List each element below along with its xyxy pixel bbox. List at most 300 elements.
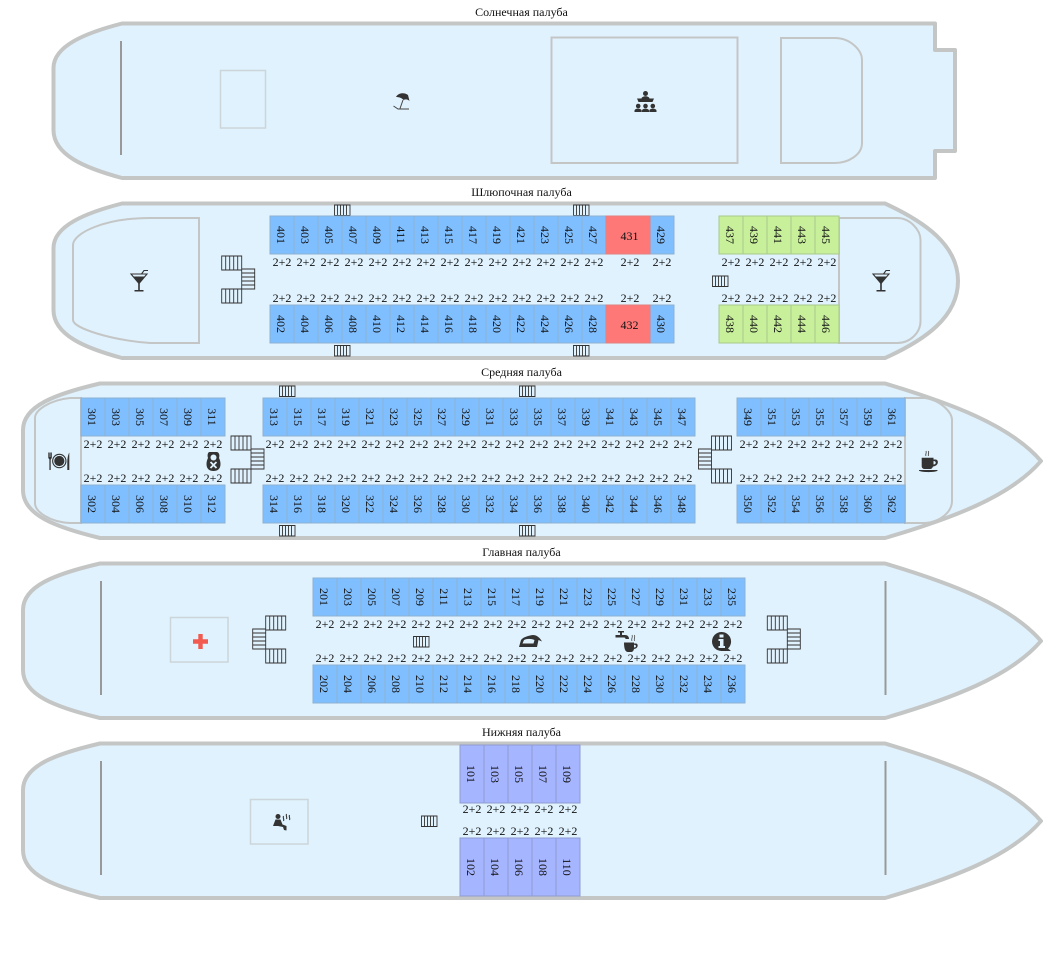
capacity labels: bottom row: 2+2 — [554, 471, 572, 485]
cabins: top row: 357 — [837, 408, 851, 426]
stairs — [414, 636, 429, 647]
cabins: top row: 361 — [885, 408, 899, 426]
cabins: bottom row: 310 — [181, 495, 195, 513]
capacity labels: top row: 2+2 — [676, 617, 694, 631]
cabin 432 — [606, 305, 650, 343]
capacity labels: top row: 2+2 — [506, 437, 524, 451]
staircase: left — [231, 436, 264, 483]
capacity labels: bottom row: 2+2 — [740, 471, 758, 485]
cabins: bottom blue row: 416 — [442, 315, 456, 333]
cabins: bottom row: 322 — [363, 495, 377, 513]
cabins: bottom row: 362 — [885, 495, 899, 513]
capacity labels: bottom row: 2+2 — [652, 651, 670, 665]
capacity labels: bottom row: 2+2 — [794, 291, 812, 305]
cabins: top row: 207 — [389, 588, 403, 606]
capacity labels: bottom row: 2+2 — [204, 471, 222, 485]
bow divider — [884, 581, 886, 695]
capacity labels: bottom row: 2+2 — [156, 471, 174, 485]
cabins: bottom row: 350 — [741, 495, 755, 513]
cabins: bottom row: 356 — [813, 495, 827, 513]
capacity labels: bottom row: 2+2 — [487, 824, 505, 838]
cabins: top blue row: 405 — [322, 226, 336, 244]
cabins: top row: 201 — [317, 588, 331, 606]
cabins: bottom row: 358 — [837, 495, 851, 513]
deck: Sun deck — [54, 5, 955, 178]
cabins: bottom row: 208 — [389, 675, 403, 693]
capacity labels: top row: 2+2 — [626, 437, 644, 451]
capacity labels: top row: 2+2 — [460, 617, 478, 631]
cabins: top row: 331 — [483, 408, 497, 426]
cabins: bottom green row: 444 — [795, 315, 809, 333]
capacity labels: top row: 2+2 — [602, 437, 620, 451]
capacity labels: bottom row: 2+2 — [746, 291, 764, 305]
capacity labels: top row: 2+2 — [266, 437, 284, 451]
cabins: bottom row: 212 — [437, 675, 451, 693]
capacity labels: bottom row: 2+2 — [290, 471, 308, 485]
cabins: top blue row: 417 — [466, 226, 480, 244]
capacity labels: bottom row: 2+2 — [884, 471, 902, 485]
capacity labels: top row: 2+2 — [578, 437, 596, 451]
cabins: bottom row: 206 — [365, 675, 379, 693]
cabins: bottom blue row: 408 — [346, 315, 360, 333]
cabins: top row: 319 — [339, 408, 353, 426]
cabins: bottom blue row: 420 — [490, 315, 504, 333]
capacity labels: top row: 2+2 — [314, 437, 332, 451]
capacity labels: top row: 2+2 — [653, 255, 671, 269]
capacity labels: top row: 2+2 — [818, 255, 836, 269]
forward bar room — [839, 218, 920, 343]
cabins: top green row: 441 — [771, 226, 785, 244]
medical room — [170, 618, 228, 662]
cabins: top row: 105 — [512, 765, 526, 783]
capacity labels: top row: 2+2 — [585, 255, 603, 269]
cabins: top row: 211 — [437, 588, 451, 606]
stairs — [422, 816, 437, 826]
cabins: top row — [81, 398, 905, 436]
capacity labels: bottom row: 2+2 — [364, 651, 382, 665]
capacity labels: top row: 2+2 — [621, 255, 639, 269]
cabin 431: 431 — [620, 229, 638, 243]
capacity labels: top row: 2+2 — [338, 437, 356, 451]
cabins: bottom blue row: 426 — [562, 315, 576, 333]
hull: Middle deck — [23, 384, 1041, 538]
capacity labels: top row: 2+2 — [554, 437, 572, 451]
capacity labels: top row: 2+2 — [204, 437, 222, 451]
cabins: bottom row: 106 — [512, 858, 526, 876]
capacity labels: bottom row: 2+2 — [860, 471, 878, 485]
cabins: bottom row: 234 — [701, 675, 715, 693]
cabins: bottom row: 230 — [653, 675, 667, 693]
capacity labels: bottom row: 2+2 — [532, 651, 550, 665]
capacity labels: top row: 2+2 — [364, 617, 382, 631]
capacity labels: bottom row: 2+2 — [506, 471, 524, 485]
capacity labels: top row — [273, 255, 836, 269]
cabins: top blue row — [270, 216, 674, 254]
cabins: bottom row: 216 — [485, 675, 499, 693]
capacity labels: bottom row: 2+2 — [561, 291, 579, 305]
cabins: top blue row: 413 — [418, 226, 432, 244]
cabins: bottom row: 348 — [675, 495, 689, 513]
capacity labels: top row: 2+2 — [674, 437, 692, 451]
capacity labels: bottom row: 2+2 — [604, 651, 622, 665]
capacity labels: bottom row: 2+2 — [297, 291, 315, 305]
capacity labels: top row: 2+2 — [434, 437, 452, 451]
capacity labels: top row — [316, 617, 742, 631]
capacity labels: bottom row: 2+2 — [484, 651, 502, 665]
capacity labels: top row — [84, 437, 902, 451]
cabins: top row: 227 — [629, 588, 643, 606]
stern divider — [100, 581, 102, 695]
cabins: top blue row: 403 — [298, 226, 312, 244]
cabins: top row: 329 — [459, 408, 473, 426]
cabins: bottom row: 232 — [677, 675, 691, 693]
deck: Lower deck — [23, 725, 1041, 898]
cabins: top row: 327 — [435, 408, 449, 426]
capacity labels: top row: 2+2 — [417, 255, 435, 269]
cabins: bottom row: 346 — [651, 495, 665, 513]
cabins: bottom green row: 446 — [819, 315, 833, 333]
capacity labels: bottom row: 2+2 — [482, 471, 500, 485]
cabins: bottom row: 352 — [765, 495, 779, 513]
capacity labels: bottom row: 2+2 — [362, 471, 380, 485]
cabins: bottom row: 220 — [533, 675, 547, 693]
cabins: top row: 103 — [488, 765, 502, 783]
cabins: top row: 343 — [627, 408, 641, 426]
capacity labels: bottom row: 2+2 — [84, 471, 102, 485]
capacity labels: bottom row: 2+2 — [465, 291, 483, 305]
title: Sun deck: Солнечная палуба — [475, 5, 569, 19]
capacity labels: bottom row: 2+2 — [628, 651, 646, 665]
bar room — [73, 218, 199, 343]
capacity labels: bottom row: 2+2 — [108, 471, 126, 485]
capacity labels: top row: 2+2 — [604, 617, 622, 631]
staircase: right — [767, 616, 800, 663]
capacity labels: top row: 2+2 — [700, 617, 718, 631]
capacity labels: bottom row: 2+2 — [412, 651, 430, 665]
cabins: top row: 235 — [725, 588, 739, 606]
cabins: top blue row: 423 — [538, 226, 552, 244]
cabins: bottom row: 210 — [413, 675, 427, 693]
cabins: top row — [460, 745, 580, 803]
capacity labels: top row: 2+2 — [180, 437, 198, 451]
cabins: bottom row: 224 — [581, 675, 595, 693]
capacity labels: bottom row: 2+2 — [818, 291, 836, 305]
capacity labels: top row: 2+2 — [537, 255, 555, 269]
capacity labels: top row: 2+2 — [561, 255, 579, 269]
cabins: top blue row: 427 — [586, 226, 600, 244]
cabins: top row: 321 — [363, 408, 377, 426]
cabins: bottom row: 326 — [411, 495, 425, 513]
cabins: top green row: 437 — [723, 226, 737, 244]
cabin 431 — [606, 216, 650, 254]
capacity labels: top row: 2+2 — [108, 437, 126, 451]
conference room — [552, 38, 738, 163]
capacity labels: bottom row: 2+2 — [441, 291, 459, 305]
capacity labels: bottom row: 2+2 — [386, 471, 404, 485]
forward cafe room — [905, 398, 952, 523]
icon: red cross — [193, 634, 208, 649]
capacity labels: top row: 2+2 — [290, 437, 308, 451]
cabins: bottom row: 318 — [315, 495, 329, 513]
cabins: bottom row: 102 — [464, 858, 478, 876]
capacity labels: bottom row: 2+2 — [556, 651, 574, 665]
capacity labels: bottom row: 2+2 — [338, 471, 356, 485]
cabins: bottom row: 306 — [133, 495, 147, 513]
cabins: top blue row: 409 — [370, 226, 384, 244]
capacity labels: bottom row: 2+2 — [266, 471, 284, 485]
cabins: bottom row: 108 — [536, 858, 550, 876]
cabins: bottom row: 328 — [435, 495, 449, 513]
capacity labels: top row: 2+2 — [321, 255, 339, 269]
capacity labels: top row: 2+2 — [812, 437, 830, 451]
title: Boat deck: Шлюпочная палуба — [471, 185, 572, 199]
capacity labels: top row: 2+2 — [746, 255, 764, 269]
capacity labels: bottom row: 2+2 — [674, 471, 692, 485]
cabins: top row: 347 — [675, 408, 689, 426]
cabins: bottom blue row: 422 — [514, 315, 528, 333]
cabins: top row: 339 — [579, 408, 593, 426]
capacity labels: top row: 2+2 — [369, 255, 387, 269]
capacity labels: top row: 2+2 — [340, 617, 358, 631]
capacity labels: top row: 2+2 — [508, 617, 526, 631]
cabins: bottom row: 314 — [267, 495, 281, 513]
capacity labels: bottom row — [463, 824, 577, 838]
capacity labels: bottom row: 2+2 — [314, 471, 332, 485]
cabins: bottom blue row: 402 — [274, 315, 288, 333]
capacity labels: bottom row: 2+2 — [393, 291, 411, 305]
stern divider — [100, 761, 102, 875]
icon: coffee cup — [919, 451, 938, 472]
cabins: bottom row: 302 — [85, 495, 99, 513]
cabins: bottom blue row: 424 — [538, 315, 552, 333]
capacity labels: bottom row: 2+2 — [676, 651, 694, 665]
capacity labels: bottom row: 2+2 — [417, 291, 435, 305]
icon: information — [712, 632, 731, 651]
cabins: top row — [313, 578, 745, 616]
cabins: top green row: 445 — [819, 226, 833, 244]
capacity labels: bottom row: 2+2 — [434, 471, 452, 485]
cabins: top row: 311 — [205, 408, 219, 426]
capacity labels: top row: 2+2 — [489, 255, 507, 269]
cabins: top green row — [719, 216, 839, 254]
capacity labels: top row: 2+2 — [484, 617, 502, 631]
capacity labels: bottom row: 2+2 — [180, 471, 198, 485]
icon: beach umbrella — [394, 93, 410, 109]
cabins: bottom row — [313, 665, 745, 703]
stern divider — [120, 41, 122, 155]
cabins: top row: 355 — [813, 408, 827, 426]
cabins: bottom blue row: 428 — [586, 315, 600, 333]
cabins: bottom row: 312 — [205, 495, 219, 513]
cabins: top row: 359 — [861, 408, 875, 426]
cabins: top row: 223 — [581, 588, 595, 606]
cabins: bottom green row: 442 — [771, 315, 785, 333]
cabins: top row: 203 — [341, 588, 355, 606]
cabins: bottom row — [460, 838, 580, 896]
capacity labels: bottom row: 2+2 — [508, 651, 526, 665]
cabins: top row: 313 — [267, 408, 281, 426]
title: Lower deck: Нижняя палуба — [482, 725, 562, 739]
capacity labels: top row: 2+2 — [513, 255, 531, 269]
cabins: bottom blue row: 418 — [466, 315, 480, 333]
capacity labels: top row: 2+2 — [393, 255, 411, 269]
cabins: top row: 353 — [789, 408, 803, 426]
cabins: bottom row: 226 — [605, 675, 619, 693]
cabins: top row: 317 — [315, 408, 329, 426]
deck: Middle deck — [23, 365, 1041, 538]
cabins: bottom blue row: 406 — [322, 315, 336, 333]
capacity labels: bottom row: 2+2 — [700, 651, 718, 665]
capacity labels: bottom row: 2+2 — [530, 471, 548, 485]
staircase: left — [253, 616, 286, 663]
capacity labels: top row: 2+2 — [556, 617, 574, 631]
capacity labels: top row: 2+2 — [388, 617, 406, 631]
capacity labels: bottom row: 2+2 — [602, 471, 620, 485]
stairs — [334, 205, 728, 356]
cabins: top green row: 443 — [795, 226, 809, 244]
hull: Boat deck — [54, 204, 958, 358]
cabins: bottom row: 214 — [461, 675, 475, 693]
cabins: top row: 309 — [181, 408, 195, 426]
restaurant room — [35, 398, 81, 523]
capacity labels: bottom row: 2+2 — [463, 824, 481, 838]
capacity labels: top row: 2+2 — [487, 802, 505, 816]
capacity labels: top row: 2+2 — [386, 437, 404, 451]
cabins: bottom row: 308 — [157, 495, 171, 513]
capacity labels: bottom row: 2+2 — [578, 471, 596, 485]
hull: Sun deck — [54, 24, 955, 178]
cabins: top row: 213 — [461, 588, 475, 606]
cabins: bottom blue row: 414 — [418, 315, 432, 333]
capacity labels: bottom row — [273, 291, 836, 305]
cabins: top row: 307 — [157, 408, 171, 426]
cabins: top row: 215 — [485, 588, 499, 606]
capacity labels: bottom row: 2+2 — [321, 291, 339, 305]
capacity labels: bottom row: 2+2 — [537, 291, 555, 305]
small room — [220, 70, 266, 128]
icon: conference — [634, 91, 656, 112]
capacity labels: bottom row: 2+2 — [722, 291, 740, 305]
capacity labels: top row: 2+2 — [511, 802, 529, 816]
capacity labels: bottom row — [316, 651, 742, 665]
cabins: top blue row: 421 — [514, 226, 528, 244]
capacity labels: bottom row: 2+2 — [340, 651, 358, 665]
cabins: bottom green row: 438 — [723, 315, 737, 333]
capacity labels: bottom row: 2+2 — [650, 471, 668, 485]
capacity labels: top row: 2+2 — [724, 617, 742, 631]
capacity labels: top row: 2+2 — [412, 617, 430, 631]
capacity labels: bottom row: 2+2 — [511, 824, 529, 838]
capacity labels: top row: 2+2 — [884, 437, 902, 451]
capacity labels: top row: 2+2 — [273, 255, 291, 269]
capacity labels: bottom row: 2+2 — [132, 471, 150, 485]
cabin 432: 432 — [620, 318, 638, 332]
cabins: top row: 303 — [109, 408, 123, 426]
cabins: bottom row: 218 — [509, 675, 523, 693]
capacity labels: bottom row: 2+2 — [559, 824, 577, 838]
capacity labels: top row: 2+2 — [156, 437, 174, 451]
cabins: bottom row: 304 — [109, 495, 123, 513]
capacity labels: bottom row: 2+2 — [626, 471, 644, 485]
cabins: bottom row: 324 — [387, 495, 401, 513]
icon: dining — [48, 452, 69, 470]
cabins: top blue row: 415 — [442, 226, 456, 244]
capacity labels: bottom row: 2+2 — [460, 651, 478, 665]
cabins: top row: 219 — [533, 588, 547, 606]
capacity labels: top row: 2+2 — [722, 255, 740, 269]
cabins: top blue row: 407 — [346, 226, 360, 244]
cabins: bottom row: 332 — [483, 495, 497, 513]
icon: tap and cup — [616, 631, 638, 652]
capacity labels: top row: 2+2 — [652, 617, 670, 631]
cabins: top row: 225 — [605, 588, 619, 606]
hull: Main deck — [23, 564, 1041, 718]
capacity labels: top row: 2+2 — [650, 437, 668, 451]
cabins: bottom row: 342 — [603, 495, 617, 513]
capacity labels: top row: 2+2 — [532, 617, 550, 631]
capacity labels: top row: 2+2 — [559, 802, 577, 816]
capacity labels: top row: 2+2 — [345, 255, 363, 269]
capacity labels: bottom row: 2+2 — [585, 291, 603, 305]
cabins: top row: 231 — [677, 588, 691, 606]
cabins: top blue row: 425 — [562, 226, 576, 244]
capacity labels: bottom row: 2+2 — [770, 291, 788, 305]
cabins: bottom blue row: 412 — [394, 315, 408, 333]
cabins: bottom row — [81, 485, 905, 523]
cabins: top row: 229 — [653, 588, 667, 606]
cabins: bottom row: 354 — [789, 495, 803, 513]
capacity labels: bottom row: 2+2 — [621, 291, 639, 305]
capacity labels: top row: 2+2 — [740, 437, 758, 451]
cabins: bottom row: 336 — [531, 495, 545, 513]
cabins: top row: 335 — [531, 408, 545, 426]
capacity labels: top row: 2+2 — [465, 255, 483, 269]
capacity labels: top row: 2+2 — [788, 437, 806, 451]
cabins: bottom blue row: 410 — [370, 315, 384, 333]
capacity labels: bottom row: 2+2 — [580, 651, 598, 665]
capacity labels: bottom row: 2+2 — [653, 291, 671, 305]
capacity labels: top row: 2+2 — [297, 255, 315, 269]
cabins: bottom row: 330 — [459, 495, 473, 513]
cabins: bottom row: 344 — [627, 495, 641, 513]
capacity labels: top row: 2+2 — [836, 437, 854, 451]
cabins: bottom green row — [719, 305, 839, 343]
capacity labels: bottom row: 2+2 — [513, 291, 531, 305]
cabins: bottom row: 360 — [861, 495, 875, 513]
cabins: top row: 107 — [536, 765, 550, 783]
cabins: top row: 333 — [507, 408, 521, 426]
capacity labels: bottom row: 2+2 — [369, 291, 387, 305]
cabins: top row: 305 — [133, 408, 147, 426]
capacity labels: bottom row: 2+2 — [812, 471, 830, 485]
capacity labels: bottom row: 2+2 — [535, 824, 553, 838]
capacity labels: top row: 2+2 — [580, 617, 598, 631]
cabins: bottom blue row: 430 — [654, 315, 668, 333]
icon: iron — [519, 635, 542, 647]
icon: sauna — [273, 814, 290, 830]
cabins: top row: 315 — [291, 408, 305, 426]
capacity labels: bottom row: 2+2 — [388, 651, 406, 665]
cabins: top row: 337 — [555, 408, 569, 426]
capacity labels: top row: 2+2 — [628, 617, 646, 631]
capacity labels: top row: 2+2 — [84, 437, 102, 451]
sauna room — [250, 800, 308, 844]
capacity labels: top row: 2+2 — [794, 255, 812, 269]
cabins: bottom green row: 440 — [747, 315, 761, 333]
cabins: bottom row: 110 — [560, 858, 574, 876]
capacity labels: top row: 2+2 — [530, 437, 548, 451]
stairs — [280, 386, 535, 536]
